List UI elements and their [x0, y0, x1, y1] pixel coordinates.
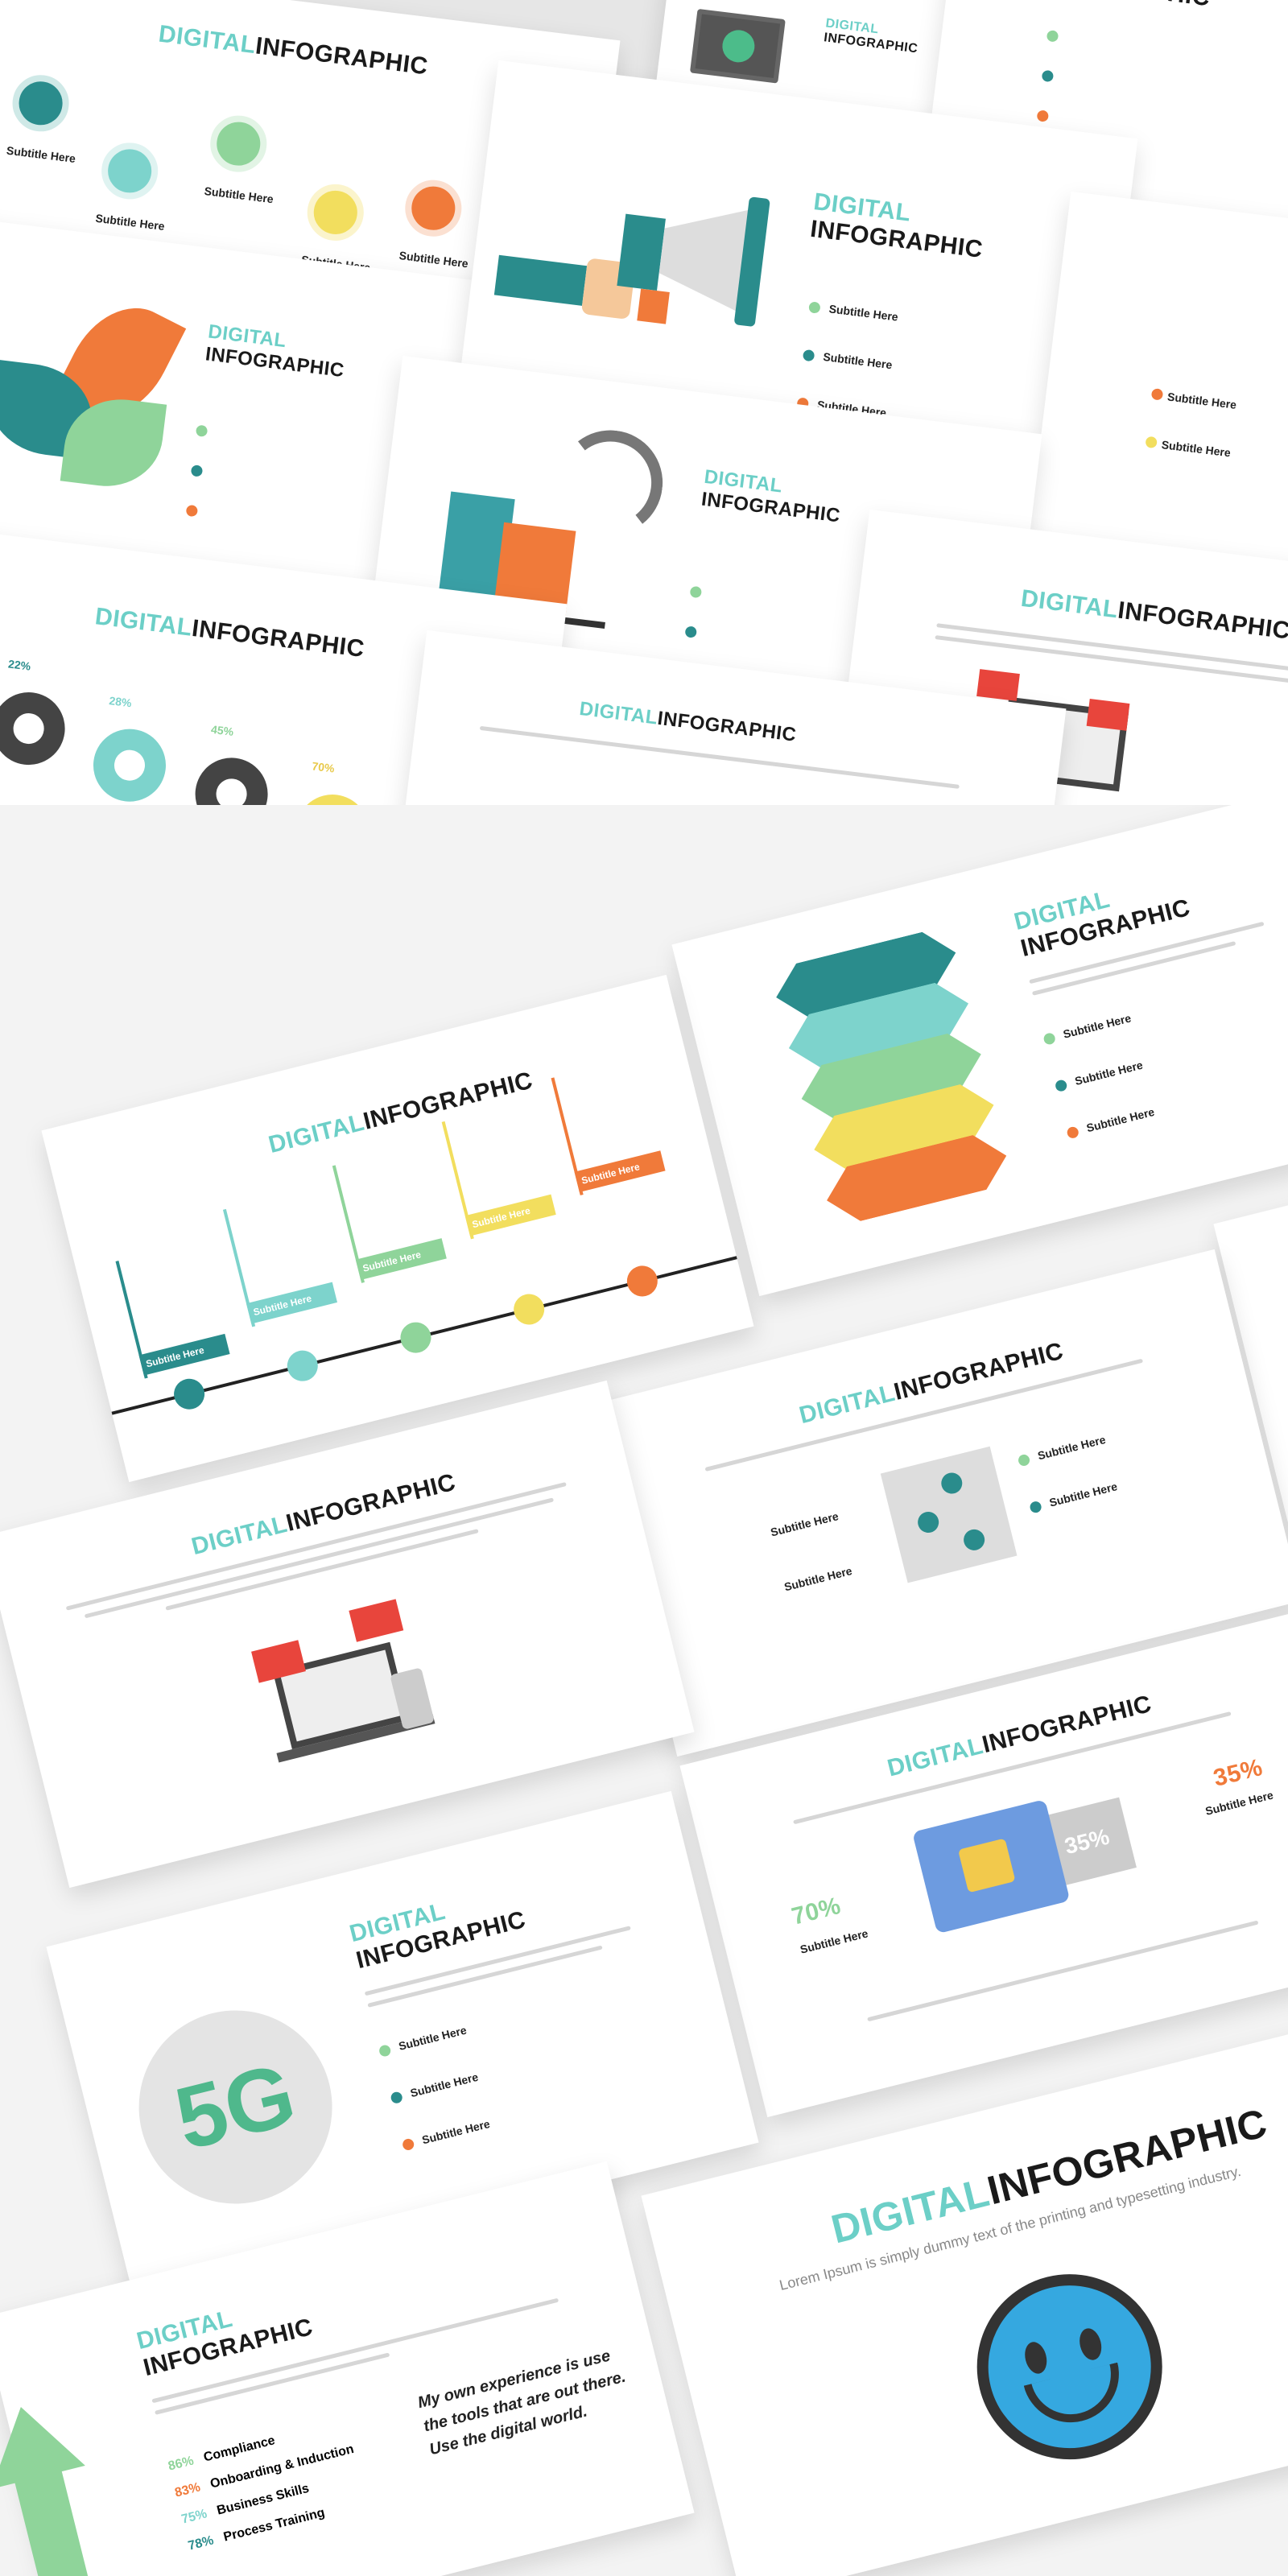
slide: thumbs: Subtitle Here: [1204, 1788, 1274, 1818]
bottom collage region: [0, 805, 1288, 2576]
stacked hexagon layers: [776, 932, 1006, 1221]
slide: 5G: Subtitle Here: [420, 2117, 491, 2146]
pins: Subtitle Here: [95, 212, 165, 233]
slide: leaves: DIGITAL: [207, 320, 287, 352]
slide: thumbs: 70%: [789, 1893, 844, 1930]
timeline line: [112, 1256, 737, 1415]
pins: Subtitle Here: [300, 253, 371, 275]
icon: smiley: [957, 2255, 1182, 2479]
slide: share: Subtitle Here: [782, 1564, 853, 1593]
slide: monitor: INFOGRAPHIC: [823, 31, 919, 56]
slide: arrow skills: INFOGRAPHIC: [141, 2314, 316, 2381]
gears row: [0, 657, 437, 805]
slide: staircase: INFOGRAPHIC: [1018, 894, 1193, 962]
slide: 5G: Subtitle Here: [409, 2070, 480, 2099]
slide: building wifi: [359, 356, 1042, 794]
slide: share: Subtitle Here: [1036, 1433, 1107, 1462]
icon: building: [440, 491, 605, 629]
slide: share: Subtitle Here: [769, 1509, 840, 1538]
slide: pin infographic: [0, 0, 620, 400]
slide: share: Subtitle Here: [1048, 1480, 1119, 1509]
slide: megaphone: DIGITAL: [812, 188, 912, 227]
slide: megaphone: Subtitle Here: [828, 302, 899, 324]
slide: arrow skills: [0, 2161, 695, 2576]
title: DIGITALINFOGRAPHIC: [157, 21, 429, 80]
gears row: 28%: [109, 694, 132, 709]
slide: laptop youtube: [826, 510, 1288, 947]
skills list: 75% Business Skills: [180, 2482, 311, 2527]
slide: laptop youtube: [0, 1381, 695, 1888]
slide: gears: DIGITALINFOGRAPHIC: [93, 603, 365, 663]
slide: laptop youtube: DIGITALINFOGRAPHIC: [189, 1469, 458, 1560]
slide: gears: [0, 526, 567, 964]
icon: speech bubbles: [914, 1797, 1137, 1932]
icon: 5G circle: [118, 1990, 353, 2224]
slide: right blank: [1027, 192, 1288, 630]
slide: share: DIGITALINFOGRAPHIC: [797, 1338, 1066, 1429]
slide: arrow skills: DIGITAL: [134, 2306, 235, 2355]
icon: laptop: [999, 697, 1129, 791]
slide: bottom middle: DIGITALINFOGRAPHIC: [578, 698, 798, 746]
slide: staircase: DIGITAL: [1011, 886, 1113, 935]
slide: timeline: [41, 975, 754, 1482]
slide: laptop youtube: DIGITALINFOGRAPHIC: [1019, 585, 1288, 645]
slide: right blank: Subtitle Here: [1166, 390, 1237, 411]
flags: [116, 1077, 665, 1378]
pins: Subtitle Here: [6, 144, 76, 165]
slide: 5G: INFOGRAPHIC: [353, 1906, 528, 1974]
slide: share: [589, 1249, 1288, 1757]
slide: smiley: DIGITALINFOGRAPHIC: [827, 2100, 1271, 2252]
skills list: [167, 2434, 355, 2553]
slide: staircase: Subtitle Here: [1085, 1105, 1156, 1134]
gears row: 45%: [210, 723, 234, 738]
slide: monitor: DIGITAL: [825, 16, 880, 36]
icon: megaphone: [494, 196, 770, 327]
icon: monitor: [690, 9, 786, 84]
slide: right blank: Subtitle Here: [1161, 438, 1232, 459]
icon: arrows: [0, 2407, 89, 2576]
slide: monitor: [650, 0, 993, 172]
flags: Subtitle Here: [361, 1249, 422, 1274]
slide: thumbs: Subtitle Here: [799, 1926, 869, 1956]
skills list: 86% Compliance: [167, 2434, 276, 2474]
slide: thumbs: DIGITALINFOGRAPHIC: [885, 1690, 1154, 1782]
slide: megaphone: Subtitle Here: [816, 398, 887, 419]
flags: Subtitle Here: [471, 1205, 531, 1230]
gears row: 70%: [312, 759, 335, 775]
slide: megaphone: INFOGRAPHIC: [809, 216, 985, 263]
slide: staircase: Subtitle Here: [1073, 1059, 1144, 1088]
slide: 5G: DIGITAL: [347, 1898, 448, 1947]
slide: smiley: [641, 2021, 1288, 2576]
gears row: 22%: [7, 657, 31, 673]
flags: Subtitle Here: [252, 1293, 312, 1318]
quote: My own experience is use the tools that are out there. Use the digital world.: [416, 2347, 628, 2458]
icon: laptop with chat: [251, 1599, 435, 1763]
slide: right partial: [1213, 1068, 1288, 1575]
slide: 5G: Subtitle Here: [397, 2024, 468, 2053]
slide: staircase: [671, 789, 1288, 1296]
top collage region: [0, 0, 1288, 805]
icon: 5G circle: 5G: [166, 2045, 305, 2169]
slide: timeline: DIGITALINFOGRAPHIC: [266, 1067, 535, 1158]
slide: megaphone: [454, 71, 1141, 435]
skills list: 78% Process Training: [187, 2506, 326, 2553]
pins: Subtitle Here: [204, 184, 275, 205]
pins: Subtitle Here: [398, 249, 469, 270]
flags: Subtitle Here: [580, 1161, 641, 1187]
slide: staircase: Subtitle Here: [1062, 1011, 1133, 1041]
skills list: 83% Onboarding & Induction: [173, 2442, 355, 2500]
icon: share box: [881, 1447, 1017, 1583]
icon: leaves: [0, 308, 187, 486]
pins: [6, 75, 469, 275]
slide: bottom middle: [383, 630, 1066, 1068]
slide: building wifi: INFOGRAPHIC: [700, 489, 841, 527]
slide: laptop dollar: [923, 0, 1288, 271]
slide: building wifi: DIGITAL: [703, 466, 784, 497]
slide: thumbs: 35%: [1211, 1754, 1265, 1792]
slide: megaphone: Subtitle Here: [823, 350, 893, 371]
slide: 5G: [46, 1791, 759, 2298]
timeline dots: [171, 1376, 208, 1413]
slide: leaves: INFOGRAPHIC: [204, 343, 345, 382]
slide: smiley: Lorem Ipsum is simply dummy text of the printing and typesetting industry.: [778, 2163, 1242, 2293]
slide: thumbs: [679, 1610, 1288, 2117]
icon: wifi arcs: [552, 424, 669, 541]
gears row: 80%: [413, 788, 437, 803]
icon: speech bubbles: 35%: [1062, 1824, 1112, 1859]
slide: leaves: [0, 208, 522, 646]
flags: Subtitle Here: [145, 1344, 205, 1369]
